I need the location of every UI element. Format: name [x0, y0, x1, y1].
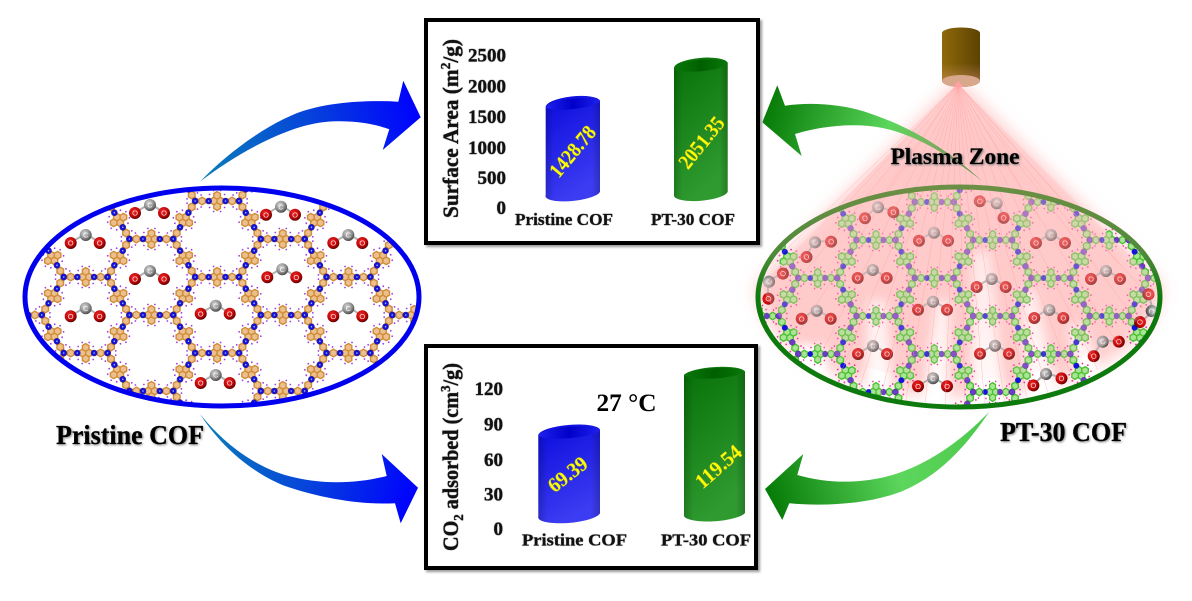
plasma rays — [770, 84, 1148, 407]
CO2 molecules, PT-30 COF: O — [1033, 239, 1039, 248]
CO2 molecules, PT-30 COF: C — [810, 237, 820, 248]
CO2 molecules, PT-30 COF: O — [916, 236, 922, 245]
CO2 molecules, PT-30 COF: O — [944, 305, 950, 314]
CO2 molecules, pristine COF: O — [330, 239, 336, 248]
CO2 molecules, PT-30 COF: O — [1006, 349, 1012, 358]
bar: PT-30 COF surface area — [673, 58, 730, 201]
category labels — [515, 210, 735, 229]
CO2 molecules, pristine COF: C — [83, 304, 89, 313]
CO2 molecules, pristine COF: O — [132, 275, 138, 284]
CO2 molecules, PT-30 COF: C — [989, 275, 995, 284]
y axis ticks: 2000 — [468, 77, 506, 98]
temperature label: 27 °C — [596, 390, 656, 417]
CO2 molecules, PT-30 COF: O — [975, 196, 985, 207]
CO2 molecules, pristine COF: O — [330, 312, 336, 321]
y axis ticks: 500 — [478, 168, 506, 189]
y axis title: 3 — [439, 385, 454, 392]
y axis ticks: 90 — [484, 415, 503, 436]
CO2 molecules, pristine COF: O — [359, 239, 365, 248]
y axis title: Surface Area (m — [438, 64, 463, 218]
CO2 molecules, pristine COF: C — [213, 301, 219, 310]
CO2 molecules, PT-30 COF: C — [992, 341, 998, 350]
bar: PT-30 COF CO2 uptake — [684, 367, 747, 522]
CO2 molecules, pristine COF: C — [278, 202, 284, 211]
y axis ticks: 0 — [496, 198, 506, 219]
category labels: Pristine COF — [515, 210, 613, 229]
CO2 molecules, PT-30 COF: O — [802, 252, 812, 262]
CO2 molecules, pristine COF: C — [280, 265, 286, 274]
PT-30 COF honeycomb lattice — [761, 190, 1156, 404]
CO2 molecules, PT-30 COF: O — [890, 207, 897, 217]
CO2 molecules, PT-30 COF: O — [945, 236, 951, 245]
CO2 molecules, pristine COF: C — [147, 201, 153, 210]
CO2 molecules, PT-30 COF: O — [884, 274, 890, 283]
arrow: PT-30 COF to CO2 adsorbed — [765, 412, 989, 520]
CO2 molecules, PT-30 COF: O — [1114, 336, 1124, 347]
y axis ticks: 1000 — [468, 138, 506, 159]
y axis title: /g) — [438, 39, 463, 64]
CO2 molecules, pristine COF: O — [293, 273, 299, 282]
plasma white streaks — [797, 249, 1100, 404]
CO2 molecules, PT-30 COF: C — [870, 266, 876, 275]
bar: PT-30 COF CO2 uptake: 119.54 — [690, 440, 747, 493]
CO2 molecules, PT-30 COF: O — [915, 382, 921, 391]
category labels — [522, 531, 751, 550]
CO2 molecules, pristine COF: O — [161, 209, 167, 218]
CO2 molecules, pristine COF: C — [83, 231, 89, 240]
y axis ticks: 1500 — [468, 107, 506, 128]
CO2 molecules, PT-30 COF: C — [992, 198, 1002, 209]
panel: CO2 adsorbed chart — [426, 346, 756, 568]
CO2 molecules, PT-30 COF: C — [930, 374, 936, 383]
CO2 molecules, PT-30 COF: O — [974, 283, 980, 292]
CO2 molecules, PT-30 COF: O — [1135, 318, 1145, 326]
CO2 molecules, PT-30 COF: O — [1089, 351, 1099, 362]
bar: PT-30 COF surface area: 2051.35 — [673, 112, 730, 173]
CO2 molecules, PT-30 COF: O — [1143, 290, 1153, 299]
CO2 molecules, PT-30 COF: C — [1042, 369, 1050, 379]
CO2 molecules, pristine COF: O — [68, 239, 74, 248]
CO2 molecules, pristine COF: O — [161, 275, 167, 284]
CO2 molecules, PT-30 COF: C — [930, 297, 936, 306]
CO2 molecules, PT-30 COF: O — [977, 349, 983, 358]
CO2 molecules, PT-30 COF: O — [855, 350, 861, 359]
CO2 molecules, PT-30 COF: C — [1146, 307, 1157, 315]
plasma wash over lattice — [762, 84, 1158, 380]
CO2 molecules, pristine COF: C — [346, 231, 352, 240]
label: PT-30 COF: PT-30 COF — [1000, 417, 1127, 447]
CO2 molecules, pristine COF: C — [213, 371, 219, 380]
CO2 molecules, pristine COF: C — [346, 304, 352, 313]
CO2 molecules, pristine COF: O — [132, 209, 138, 218]
bar: pristine COF CO2 uptake: 69.39 — [543, 451, 592, 497]
CO2 molecules, PT-30 COF: O — [1117, 275, 1123, 284]
CO2 molecules, pristine COF: O — [227, 379, 233, 388]
arrow: pristine COF to CO2 adsorbed — [200, 414, 418, 523]
category labels: PT-30 COF — [661, 531, 751, 550]
CO2 molecules, PT-30 COF: O — [778, 269, 788, 278]
y axis title: 2 — [439, 63, 454, 69]
bar: pristine COF CO2 uptake — [538, 424, 600, 523]
green ellipse outline — [758, 187, 1160, 407]
CO2 molecules, pristine COF: O — [292, 210, 298, 219]
blue ellipse outline — [25, 188, 419, 406]
CO2 molecules, PT-30 COF: O — [799, 314, 805, 323]
CO2 molecules, pristine COF: O — [263, 210, 269, 219]
y axis title: /g) — [438, 363, 463, 386]
label: pristine COF: Pristine COF — [56, 420, 204, 450]
CO2 molecules, pristine COF: O — [97, 239, 103, 248]
y axis ticks: 30 — [484, 485, 503, 506]
icon: plasma source cylinder — [942, 28, 980, 87]
CO2 molecules, PT-30 COF: O — [861, 213, 869, 223]
CO2 molecules, PT-30 COF: O — [1058, 373, 1066, 384]
bar: pristine COF surface area — [544, 96, 601, 201]
CO2 molecules, PT-30 COF: O — [884, 350, 890, 359]
y axis title: 2 — [452, 514, 467, 521]
CO2 molecules, PT-30 COF: O — [999, 213, 1009, 223]
CO2 molecules, pristine COF: O — [68, 312, 74, 321]
CO2 molecules, PT-30 COF: O — [763, 294, 774, 304]
y axis ticks: 120 — [474, 379, 503, 400]
panel: PT-30 COF ellipse — [756, 87, 1162, 410]
category labels: PT-30 COF — [651, 210, 735, 229]
y axis ticks — [474, 379, 503, 540]
CO2 molecules, PT-30 COF: C — [814, 306, 820, 315]
CO2 molecules, PT-30 COF: C — [1047, 306, 1053, 315]
y axis title: adsorbed (cm — [438, 392, 463, 514]
CO2 molecules, pristine COF: O — [97, 312, 103, 321]
CO2 molecules, PT-30 COF: O — [915, 305, 921, 314]
label: plasma zone: Plasma Zone — [890, 144, 1020, 169]
CO2 molecules, pristine COF — [65, 199, 368, 389]
panel: pristine COF ellipse — [22, 186, 422, 408]
y axis ticks: 2500 — [468, 46, 506, 67]
CO2 molecules, pristine COF: O — [264, 273, 270, 282]
pristine COF honeycomb lattice — [29, 190, 416, 403]
CO2 molecules, PT-30 COF: C — [1103, 267, 1109, 276]
y axis title: CO — [438, 518, 463, 551]
CO2 molecules, PT-30 COF: O — [1060, 314, 1066, 323]
CO2 molecules, pristine COF: O — [198, 309, 204, 318]
CO2 molecules, PT-30 COF: O — [828, 314, 834, 323]
panel: surface area chart — [426, 20, 758, 243]
CO2 molecules, pristine COF: O — [359, 312, 365, 321]
CO2 molecules, PT-30 COF: C — [1048, 231, 1054, 240]
category labels: Pristine COF — [522, 531, 627, 550]
CO2 molecules, pristine COF: O — [198, 379, 204, 388]
CO2 molecules, PT-30 COF: C — [870, 342, 876, 351]
CO2 molecules, PT-30 COF: O — [1003, 283, 1009, 292]
CO2 molecules, PT-30 COF: O — [855, 274, 861, 283]
CO2 molecules, PT-30 COF: O — [826, 236, 836, 247]
CO2 molecules, PT-30 COF: C — [764, 277, 775, 286]
y axis ticks — [468, 46, 506, 219]
CO2 molecules, PT-30 COF: C — [931, 228, 937, 237]
arrow: PT-30 COF to surface area — [762, 85, 982, 181]
CO2 molecules, PT-30 COF: O — [944, 382, 950, 391]
plasma glow — [756, 80, 1162, 397]
CO2 molecules, PT-30 COF — [753, 186, 1164, 393]
CO2 molecules, PT-30 COF: C — [1098, 336, 1108, 347]
bar: pristine COF surface area: 1428.78 — [544, 121, 601, 182]
CO2 molecules, PT-30 COF: O — [1031, 314, 1037, 323]
CO2 molecules, pristine COF: O — [227, 309, 233, 318]
y axis ticks: 0 — [494, 519, 503, 540]
arrow: pristine COF to surface area — [200, 81, 421, 182]
CO2 molecules, pristine COF: C — [147, 267, 153, 276]
y axis ticks: 60 — [484, 450, 503, 471]
CO2 molecules, PT-30 COF: O — [1062, 239, 1068, 248]
CO2 molecules, PT-30 COF: O — [1088, 275, 1094, 284]
CO2 molecules, PT-30 COF: O — [1029, 380, 1037, 391]
CO2 molecules, PT-30 COF: C — [874, 202, 882, 212]
